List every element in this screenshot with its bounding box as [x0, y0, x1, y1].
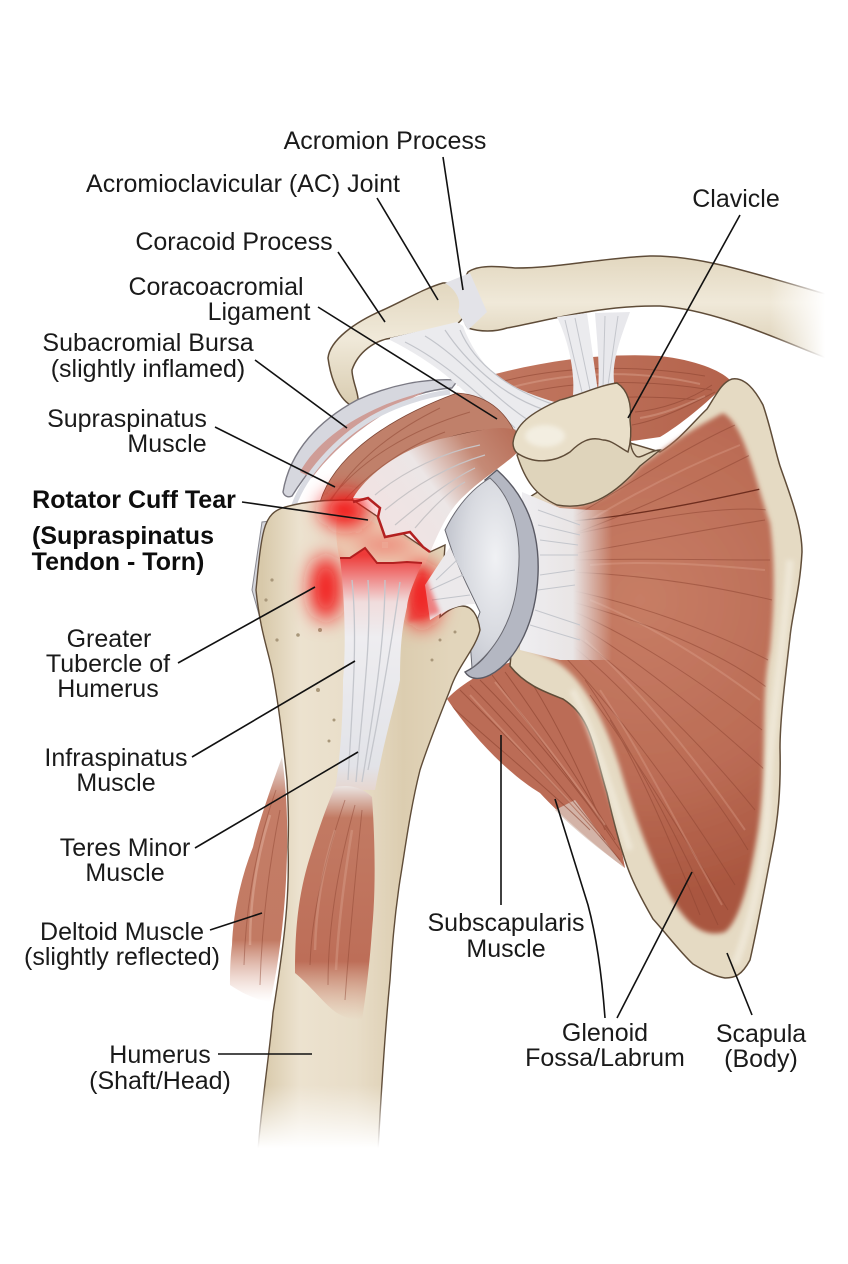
clavicle: [461, 256, 832, 360]
supraspinatus tendon, torn: [353, 428, 520, 552]
subscapularis muscle: [447, 660, 625, 868]
humerus capsule strip: [252, 520, 280, 625]
scapula body: [510, 379, 802, 978]
supraspinatus muscle band: [457, 355, 730, 445]
label: Acromioclavicular (AC) Joint: Acromioclavicular (AC) Joint: [86, 170, 400, 198]
label: Subacromial Bursa: (slightly inflamed): [51, 355, 245, 383]
AC joint capsule: [445, 273, 487, 330]
scapular muscle: [520, 413, 774, 934]
bursa: [283, 380, 458, 505]
label: Coracoacromial Ligament: Ligament: [208, 298, 310, 326]
label: Clavicle: Clavicle: [692, 185, 780, 213]
deltoid muscle: [230, 757, 287, 1002]
tear gap peach area: [336, 505, 430, 565]
glenohumeral capsule fan: [425, 547, 475, 620]
teres minor muscle: [295, 786, 375, 1020]
leader lines: [178, 157, 752, 1054]
label: Rotator Cuff Tear: Rotator Cuff Tear: [32, 486, 236, 514]
humerus: [256, 500, 480, 1150]
illustration: shoulder anatomy: [230, 256, 840, 1155]
label: Greater Tubercle of Humerus: Tubercle of: [46, 650, 170, 678]
label: Coracoacromial Ligament: Coracoacromial: [128, 273, 304, 301]
label: Supraspinatus Muscle: Muscle: [127, 430, 207, 458]
scapular muscle fibres: [548, 425, 772, 925]
label: Scapula (Body): (Body): [724, 1045, 798, 1073]
red wedge beside stump: [407, 567, 440, 623]
label: Acromion Process: Acromion Process: [284, 127, 486, 155]
coracoid process: [513, 383, 660, 506]
supraspinatus muscle belly: [317, 393, 520, 530]
label: Teres Minor Muscle: Muscle: [85, 859, 165, 887]
infraspinatus tendon stump: [335, 548, 422, 790]
label: Teres Minor Muscle: Teres Minor: [60, 834, 190, 862]
coracoacromial ligament: [390, 322, 565, 440]
label: Supraspinatus Tendon torn: (Supraspinatus: [32, 522, 214, 550]
rotator cuff tendon fan on scapula: [520, 492, 612, 660]
label: Coracoid Process: Coracoid Process: [135, 228, 333, 256]
label: Glenoid Fossa/Labrum: Fossa/Labrum: [525, 1044, 685, 1072]
label: Infraspinatus Muscle: Infraspinatus: [44, 744, 188, 772]
label: Supraspinatus Muscle: Supraspinatus: [47, 405, 207, 433]
inflammation: [310, 492, 439, 627]
label: Deltoid Muscle: Deltoid Muscle: [40, 918, 204, 946]
conoid and trapezoid ligaments: [557, 312, 630, 395]
label: Subacromial Bursa: Subacromial Bursa: [42, 329, 254, 357]
acromion: [328, 283, 467, 407]
label: Infraspinatus Muscle: Muscle: [76, 769, 156, 797]
humeral head and labrum: [445, 470, 538, 678]
label: Subscapularis Muscle: Muscle: [466, 935, 546, 963]
clavicle fade: [770, 270, 840, 370]
label: Supraspinatus Tendon torn: Tendon - Torn): [32, 548, 204, 576]
label: Deltoid Muscle: (slightly reflected): [24, 943, 220, 971]
label: Humerus (Shaft/Head): (Shaft/Head): [89, 1067, 231, 1095]
label: Greater Tubercle of Humerus: Greater: [67, 625, 151, 653]
label: Glenoid Fossa/Labrum: Glenoid: [562, 1019, 648, 1047]
label: Subscapularis Muscle: Subscapularis: [427, 909, 585, 937]
label: Scapula (Body): Scapula: [716, 1020, 806, 1048]
label: Greater Tubercle of Humerus: Humerus: [57, 675, 159, 703]
label: Humerus (Shaft/Head): Humerus: [109, 1041, 211, 1069]
shaft fade: [245, 1085, 395, 1155]
